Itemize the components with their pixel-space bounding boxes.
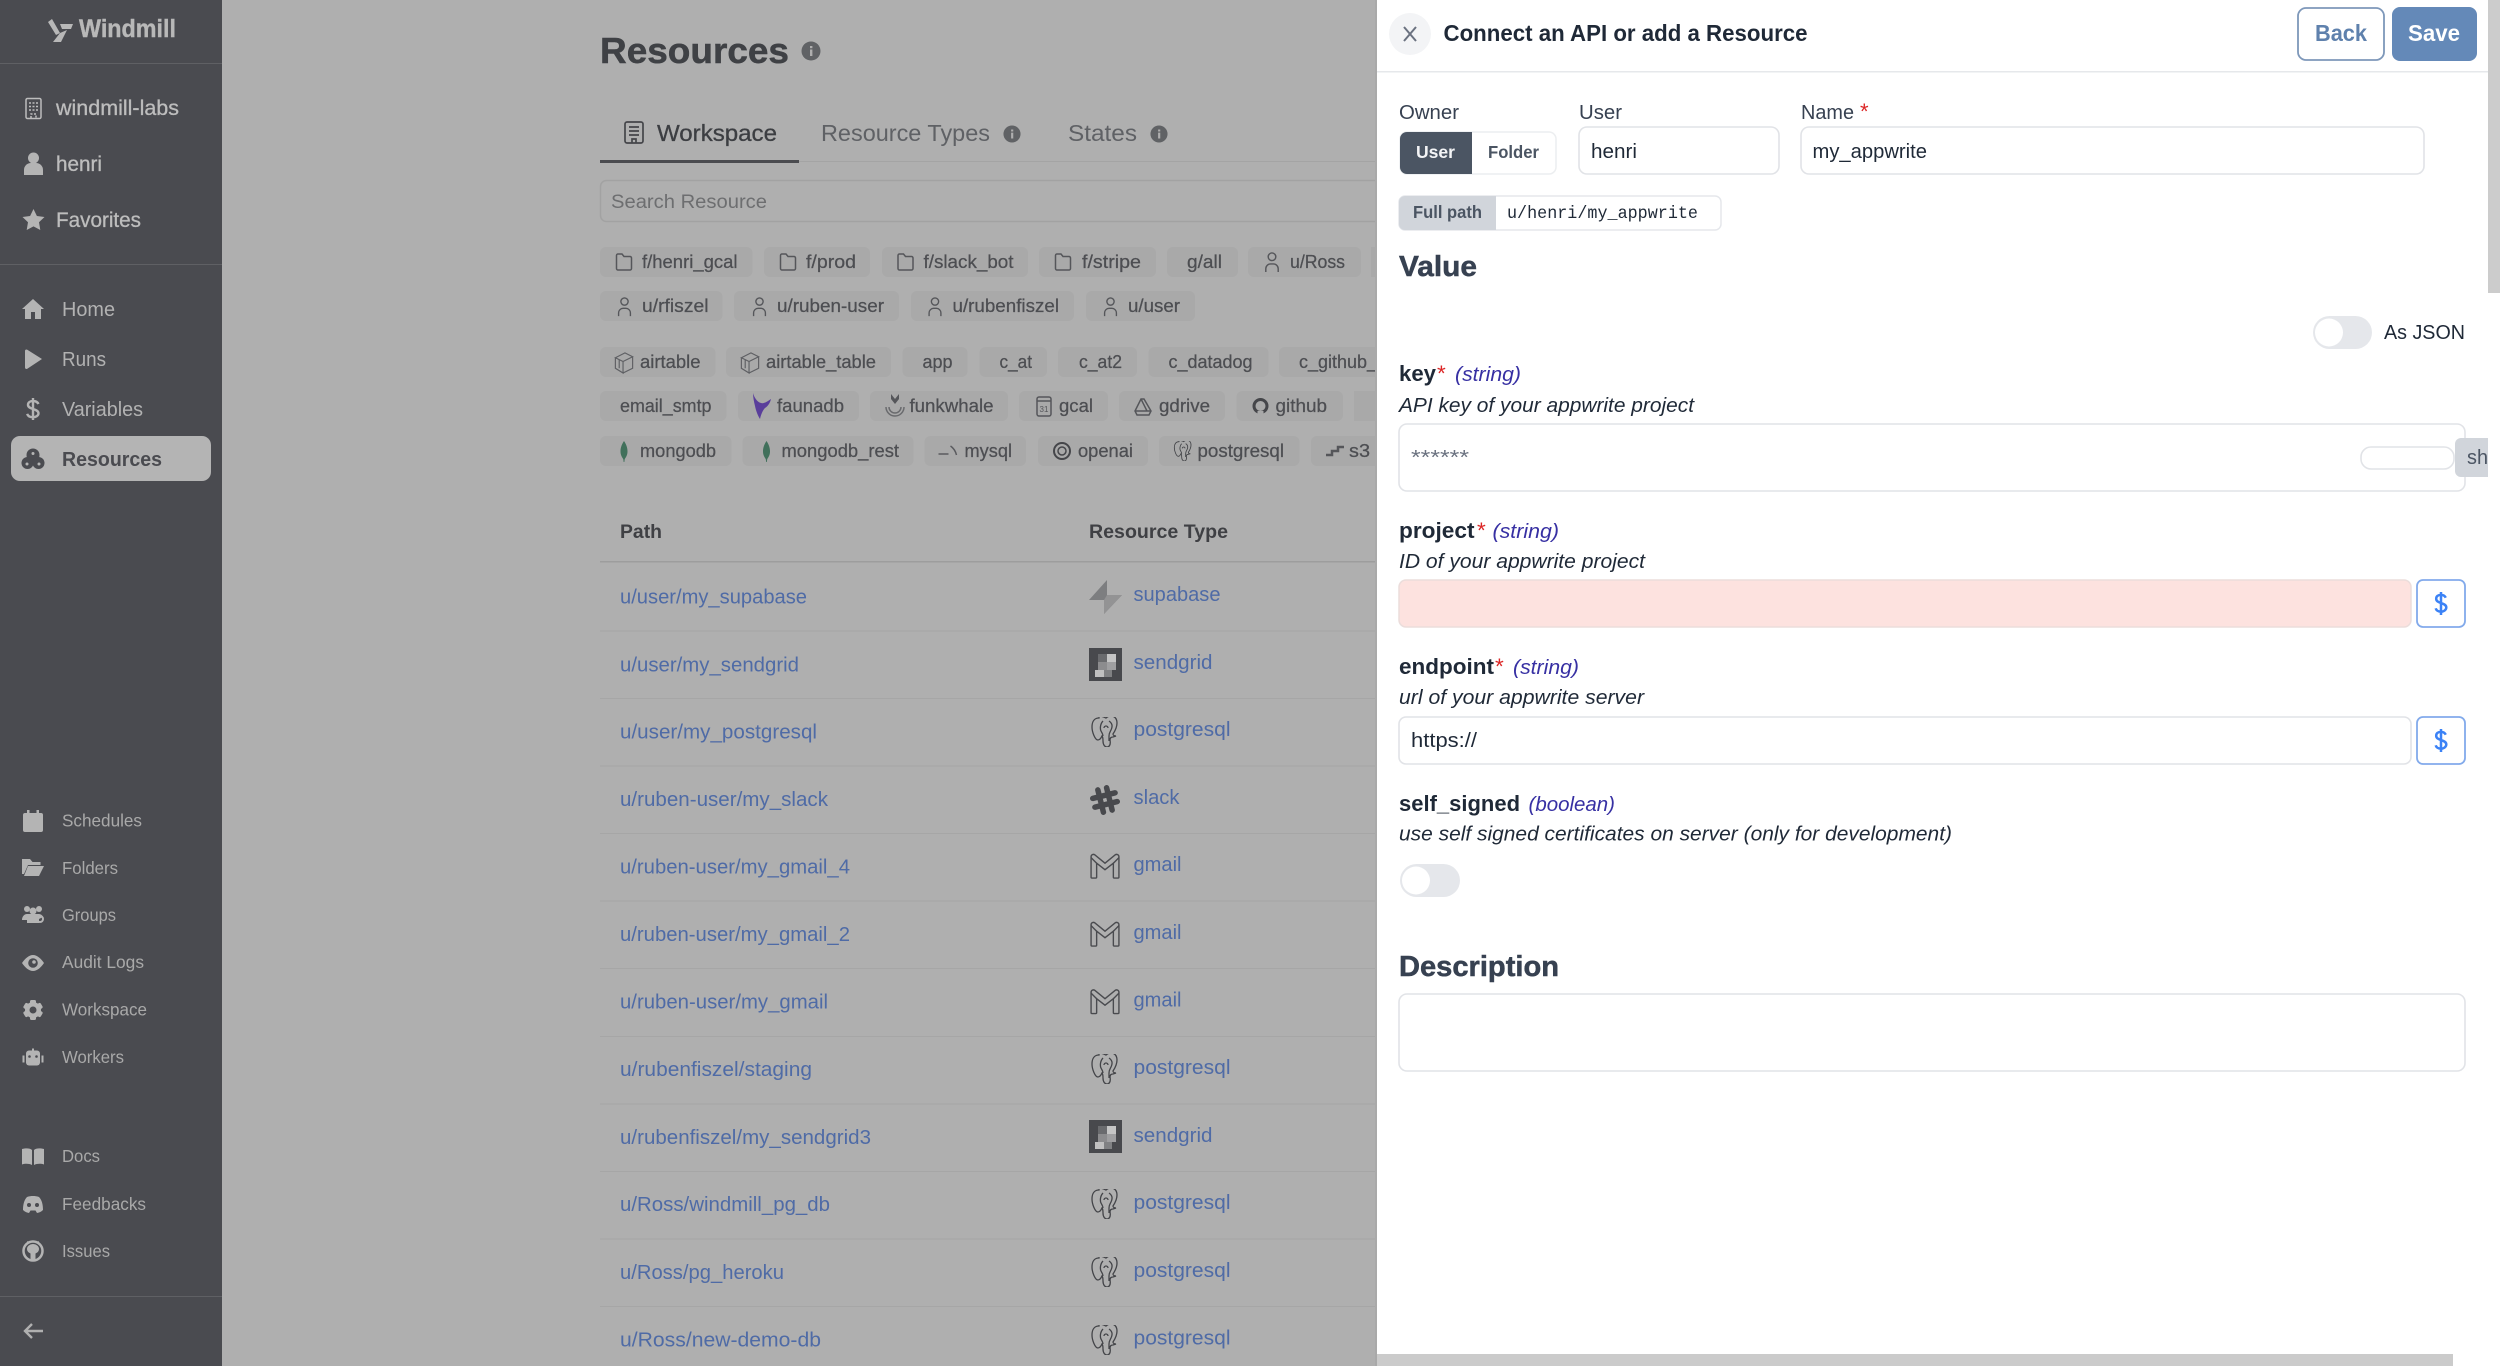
nav item: Runs: Runs (62, 349, 106, 371)
nav item: Variables (27, 398, 143, 421)
chip: mongodb (600, 436, 732, 466)
nav item: Favorites: Favorites (56, 209, 141, 232)
chip: f/stripe: f/stripe (1082, 251, 1141, 272)
row: pg_heroku: u/Ross/pg_heroku (620, 1262, 784, 1284)
field: Name: * (1860, 99, 1869, 124)
chip: g/all: g/all (1187, 251, 1222, 272)
field: self_signed (1399, 791, 1952, 897)
chip: airtable (600, 347, 716, 377)
row: staging: u/rubenfiszel/staging (620, 1059, 812, 1081)
nav item: Groups (22, 905, 116, 925)
chip: f/stripe (1039, 247, 1156, 277)
owner toggle: User (1416, 142, 1455, 162)
row: my_supabase: u/user/my_supabase (620, 586, 807, 608)
field: key: API key of your appwrite project (1398, 395, 1696, 417)
chip: u/user (1086, 291, 1195, 321)
nav item: Schedules: Schedules (62, 811, 142, 831)
drawer header (1377, 7, 2488, 72)
chip: u/Ross (1248, 247, 1361, 277)
row: staging: postgresql (1134, 1057, 1230, 1079)
row: my_gmail: u/ruben-user/my_gmail (620, 992, 828, 1014)
search box (600, 180, 1390, 222)
row: my_postgresql: u/user/my_postgresql (620, 722, 817, 744)
chip: faunadb: faunadb (777, 395, 844, 416)
owner toggle: Owner (1399, 102, 1459, 124)
chip: c_datadog: c_datadog (1168, 351, 1252, 373)
tabs: Resource Types (821, 120, 990, 146)
row: my_gmail_4 (620, 854, 1182, 878)
field: key: (string) (1455, 364, 1521, 386)
chip: airtable: airtable (640, 351, 700, 372)
row: new-demo-db: postgresql (1134, 1328, 1230, 1350)
chip: u/Ross: u/Ross (1290, 251, 1345, 272)
field: endpoint: https:// (1411, 730, 1477, 752)
nav item: Workers: Workers (62, 1047, 124, 1067)
button: show (2455, 438, 2488, 477)
field: key: ****** (1411, 447, 1469, 469)
field: self_signed: (boolean) (1528, 794, 1615, 816)
table header: Path (620, 521, 662, 543)
tabs (600, 120, 1377, 163)
chip: u/ruben-user (734, 291, 899, 321)
chip: postgresql (1159, 436, 1300, 466)
chip: c_at2: c_at2 (1079, 351, 1122, 373)
nav item: Resources active (11, 436, 211, 481)
user: henri (24, 152, 102, 176)
button: Save (2392, 7, 2477, 61)
full path badge: u/henri/my_appwrite (1507, 204, 1698, 224)
nav item: Groups: Groups (62, 905, 116, 925)
field: Name: Name (1801, 102, 1854, 124)
row: my_sendgrid3: u/rubenfiszel/my_sendgrid3 (620, 1127, 871, 1149)
owner toggle: Folder (1488, 142, 1539, 162)
filter chips: owners (600, 247, 1377, 321)
nav item: Docs: Docs (62, 1146, 100, 1166)
nav item: Runs (25, 349, 106, 371)
chip: c_datadog (1148, 347, 1268, 377)
field: endpoint: * (1495, 654, 1504, 679)
chip: c_at2 (1058, 347, 1137, 377)
button: Back: Back (2315, 20, 2367, 46)
chip: openai: openai (1078, 440, 1133, 461)
chip: c_github (1279, 347, 1389, 377)
nav item: Workers (22, 1047, 124, 1067)
field: Name: my_appwrite (1812, 141, 1927, 163)
table: resources list (600, 521, 1377, 1355)
row: my_slack (620, 786, 1180, 814)
chip: f/slack_bot: f/slack_bot (924, 251, 1014, 273)
field: project: ID of your appwrite project (1399, 551, 1647, 573)
nav item: Issues: Issues (62, 1241, 110, 1261)
chip: airtable_table (726, 347, 891, 377)
toggle: self_signed (1400, 864, 1460, 897)
chip: email_smtp: email_smtp (620, 395, 712, 417)
field: Name (1801, 99, 2424, 174)
icon: collapse arrow (25, 1324, 43, 1338)
table header: Resource Type (1089, 521, 1228, 543)
chip: u/rubenfiszel (911, 291, 1074, 321)
nav item: Audit Logs (22, 952, 144, 972)
field: User: User (1579, 102, 1622, 124)
row: my_gmail_2: u/ruben-user/my_gmail_2 (620, 924, 850, 946)
chip: u/user: u/user (1128, 295, 1180, 316)
field: endpoint: url of your appwrite server (1399, 687, 1645, 709)
row: my_postgresql: postgresql (1134, 719, 1230, 741)
chip: mysql: mysql (964, 440, 1012, 461)
field: description textarea (1399, 994, 2465, 1071)
chip: gcal (1019, 391, 1108, 421)
chip: gcal: gcal (1059, 395, 1093, 416)
row: new-demo-db (620, 1324, 1230, 1355)
nav item: Folders (22, 858, 118, 878)
chip: funkwhale (870, 391, 1008, 421)
row: my_sendgrid (620, 648, 1212, 681)
nav item: Audit Logs: Audit Logs (62, 952, 144, 972)
field: self_signed: use self signed certificates on server (only for development) (1399, 824, 1952, 846)
nav item: Home (22, 299, 115, 321)
chip: f/prod (764, 247, 870, 277)
row: windmill_pg_db (620, 1188, 1230, 1219)
row: my_gmail_2 (620, 922, 1182, 946)
nav item: Workspace: Workspace (62, 999, 147, 1019)
field: project: * (1477, 518, 1486, 543)
panel: connect resource drawer (1375, 0, 2500, 1366)
field: endpoint: (string) (1513, 657, 1579, 679)
nav item: Feedbacks (23, 1194, 146, 1214)
field: endpoint (1399, 654, 2465, 764)
chip: mongodb: mongodb (640, 440, 716, 461)
field: key: key (1399, 361, 1436, 386)
chip: mongodb_rest: mongodb_rest (782, 440, 899, 462)
chip: github: github (1276, 395, 1327, 416)
row: staging (620, 1053, 1230, 1084)
row: my_sendgrid3 (620, 1120, 1212, 1153)
chip: u/ruben-user: u/ruben-user (777, 295, 884, 316)
chip: funkwhale: funkwhale (910, 395, 994, 416)
nav item: Folders: Folders (62, 858, 118, 878)
toggle: As JSON (2313, 316, 2465, 349)
row: my_gmail: gmail (1134, 990, 1182, 1012)
nav item: Docs (22, 1146, 100, 1166)
row: my_supabase: supabase (1134, 584, 1220, 606)
drawer title: Connect an API or add a Resource (1444, 20, 1808, 46)
chip: c_at: c_at (1000, 351, 1032, 373)
field: key (1398, 361, 2488, 491)
filter chips: resource types (600, 347, 1389, 466)
heading: Description: Description (1399, 951, 1559, 983)
nav item: Issues (24, 1241, 110, 1261)
full path badge (1399, 196, 1721, 230)
chip: app: app (922, 351, 952, 372)
chip: f/prod: f/prod (806, 251, 856, 272)
chip: email_smtp (600, 391, 726, 421)
row: my_gmail (620, 990, 1182, 1014)
toggle: As JSON: As JSON (2384, 322, 2465, 344)
chip: f/slack_bot (882, 247, 1028, 277)
chip: gdrive (1119, 391, 1225, 421)
chip: f/henri_gcal (600, 247, 752, 277)
nav item: Home: Home (62, 299, 115, 321)
field: project: project (1399, 518, 1475, 543)
row: new-demo-db: u/Ross/new-demo-db (620, 1330, 821, 1352)
chip: u/rfiszel (600, 291, 722, 321)
chip: gcal: 31 (1040, 405, 1049, 414)
chip: app (902, 347, 968, 377)
logo: Windmill: Windmill (79, 15, 176, 43)
row: windmill_pg_db: postgresql (1134, 1192, 1230, 1214)
user: henri: henri (56, 153, 102, 176)
full path badge: Full path (1413, 202, 1482, 222)
nav item: Resources active: Resources (62, 449, 162, 471)
row: my_postgresql (620, 716, 1230, 747)
field: self_signed: self_signed (1399, 791, 1520, 816)
row: pg_heroku: postgresql (1134, 1260, 1230, 1282)
chip: faunadb (738, 391, 859, 421)
field: project: (string) (1492, 521, 1559, 543)
button: variable picker (2417, 717, 2465, 764)
chip: gdrive: gdrive (1159, 395, 1210, 416)
panel: resources page (600, 30, 1390, 1355)
search box: Search Resource (611, 192, 767, 213)
icon: close button (1389, 13, 1431, 55)
chip: postgresql: postgresql (1198, 440, 1284, 461)
chip: github (1236, 391, 1343, 421)
field: project (1399, 518, 2465, 627)
tabs: Workspace (657, 120, 777, 146)
tabs: States (1068, 120, 1137, 146)
button: show: sh (2467, 447, 2488, 469)
row: pg_heroku (620, 1256, 1230, 1287)
field: User: henri (1591, 141, 1637, 163)
row: my_sendgrid: u/user/my_sendgrid (620, 654, 799, 676)
field: endpoint: endpoint (1399, 654, 1494, 679)
nav item: Variables: Variables (62, 399, 143, 421)
heading: Resources: Resources (600, 30, 789, 71)
chip: u/rubenfiszel: u/rubenfiszel (952, 295, 1059, 316)
row: my_gmail_4: u/ruben-user/my_gmail_4 (620, 856, 850, 878)
row: my_slack: slack (1134, 787, 1180, 809)
chip: f/henri_gcal: f/henri_gcal (642, 251, 738, 273)
chip: s3 (1311, 436, 1381, 466)
row: my_gmail_2: gmail (1134, 922, 1182, 944)
nav item: Feedbacks: Feedbacks (62, 1194, 146, 1214)
row: my_slack: u/ruben-user/my_slack (620, 789, 829, 811)
nav item: Workspace (23, 999, 147, 1020)
table header (600, 521, 1377, 562)
owner toggle (1399, 102, 1556, 174)
chip: c_at (980, 347, 1047, 377)
chip: mysql (924, 436, 1026, 466)
heading: Value: Value (1399, 251, 1477, 283)
button: variable picker (2417, 580, 2465, 627)
row: my_gmail_4: gmail (1134, 854, 1182, 876)
field: User (1579, 102, 1779, 174)
chip: airtable_table: airtable_table (766, 351, 876, 373)
workspace selector: windmill-labs: windmill-labs (55, 97, 179, 120)
row: my_sendgrid: sendgrid (1134, 652, 1212, 674)
chip: g/all (1167, 247, 1238, 277)
field: key: * (1437, 361, 1446, 386)
panel: sidebar (0, 0, 222, 1366)
row: windmill_pg_db: u/Ross/windmill_pg_db (620, 1194, 830, 1216)
chip: s3: s3 (1349, 440, 1370, 461)
chip: openai (1038, 436, 1148, 466)
row: my_supabase (620, 580, 1220, 614)
button: Back (2298, 8, 2384, 60)
chip: u/rfiszel: u/rfiszel (642, 295, 708, 316)
button: Save: Save (2408, 20, 2460, 46)
nav item: Schedules (23, 810, 142, 832)
row: my_sendgrid3: sendgrid (1134, 1125, 1212, 1147)
chip: mongodb_rest (742, 436, 914, 466)
chip: c_github: c_github_ (1299, 351, 1378, 373)
